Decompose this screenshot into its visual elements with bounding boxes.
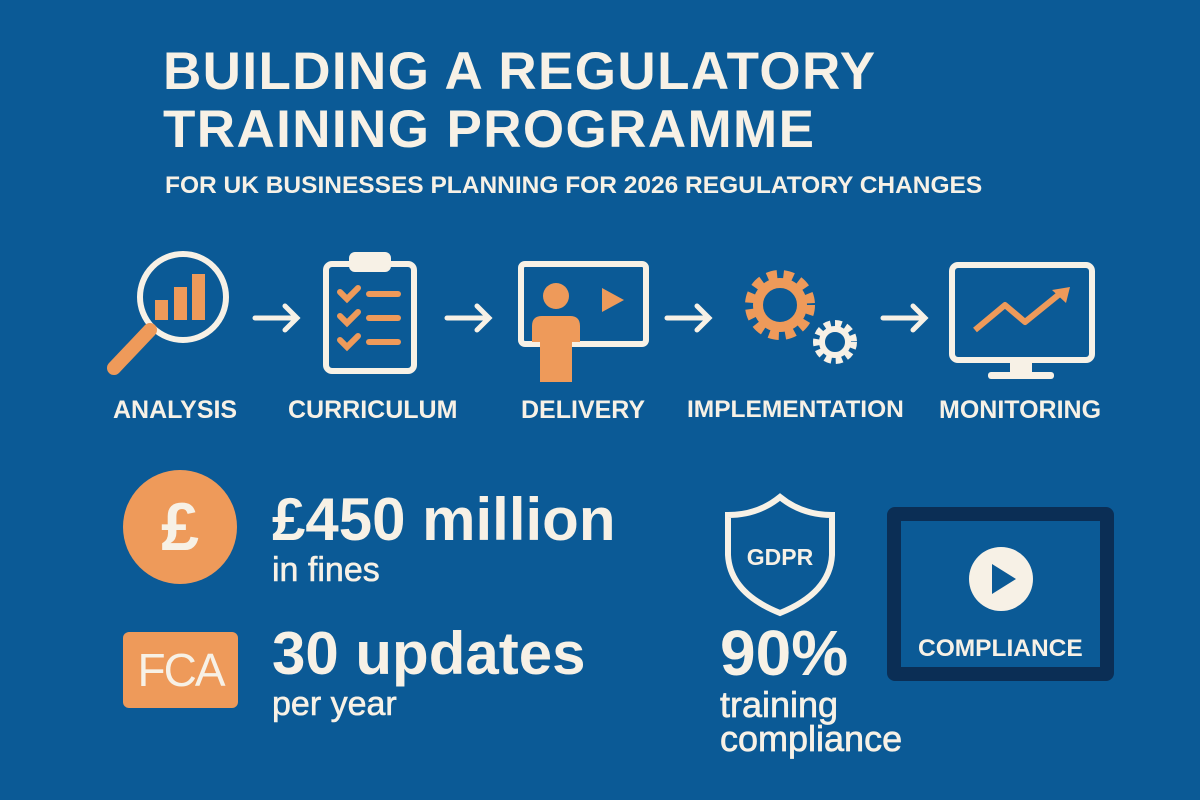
icon: FCA logo: FCA	[138, 644, 224, 696]
arrow	[883, 306, 925, 330]
icon: GDPR shield: GDPR	[747, 544, 814, 570]
icon: pound coin	[123, 470, 237, 584]
icon: GDPR shield	[725, 493, 835, 616]
subtitle: FOR UK BUSINESSES PLANNING FOR 2026 REGULATORY CHANGES	[165, 172, 982, 199]
stat: compliance	[720, 617, 902, 759]
arrow	[255, 306, 297, 330]
stat: compliance: training	[720, 684, 838, 725]
stat: updates: per year	[272, 685, 397, 723]
stat: fines	[272, 486, 615, 589]
stat: fines: in fines	[272, 551, 380, 589]
step labels: MONITORING	[939, 396, 1101, 424]
stat: updates: 30 updates	[272, 620, 585, 687]
icon: monitoring	[952, 265, 1092, 379]
title	[163, 42, 876, 159]
icon: implementation gears	[752, 277, 852, 359]
icon: play	[969, 547, 1033, 611]
arrow	[447, 306, 489, 330]
compliance video panel	[887, 507, 1114, 681]
step labels: DELIVERY	[521, 396, 645, 424]
stat: updates	[272, 620, 585, 723]
icon: analysis magnifier	[114, 254, 226, 368]
step labels: CURRICULUM	[288, 396, 457, 424]
step labels	[113, 396, 1101, 424]
icon: FCA logo	[123, 632, 238, 708]
title: TRAINING PROGRAMME	[163, 100, 815, 159]
icon: pound coin: £	[161, 489, 199, 565]
step labels: IMPLEMENTATION	[687, 396, 904, 423]
stat: compliance: compliance	[720, 718, 902, 759]
stat: fines: £450 million	[272, 486, 615, 553]
label: COMPLIANCE	[918, 635, 1083, 662]
icon: delivery screen	[521, 264, 646, 382]
title: BUILDING A REGULATORY	[163, 42, 876, 101]
arrow	[667, 306, 709, 330]
icon: curriculum clipboard	[326, 252, 414, 371]
stat: compliance: 90%	[720, 617, 848, 689]
step labels: ANALYSIS	[113, 396, 237, 424]
